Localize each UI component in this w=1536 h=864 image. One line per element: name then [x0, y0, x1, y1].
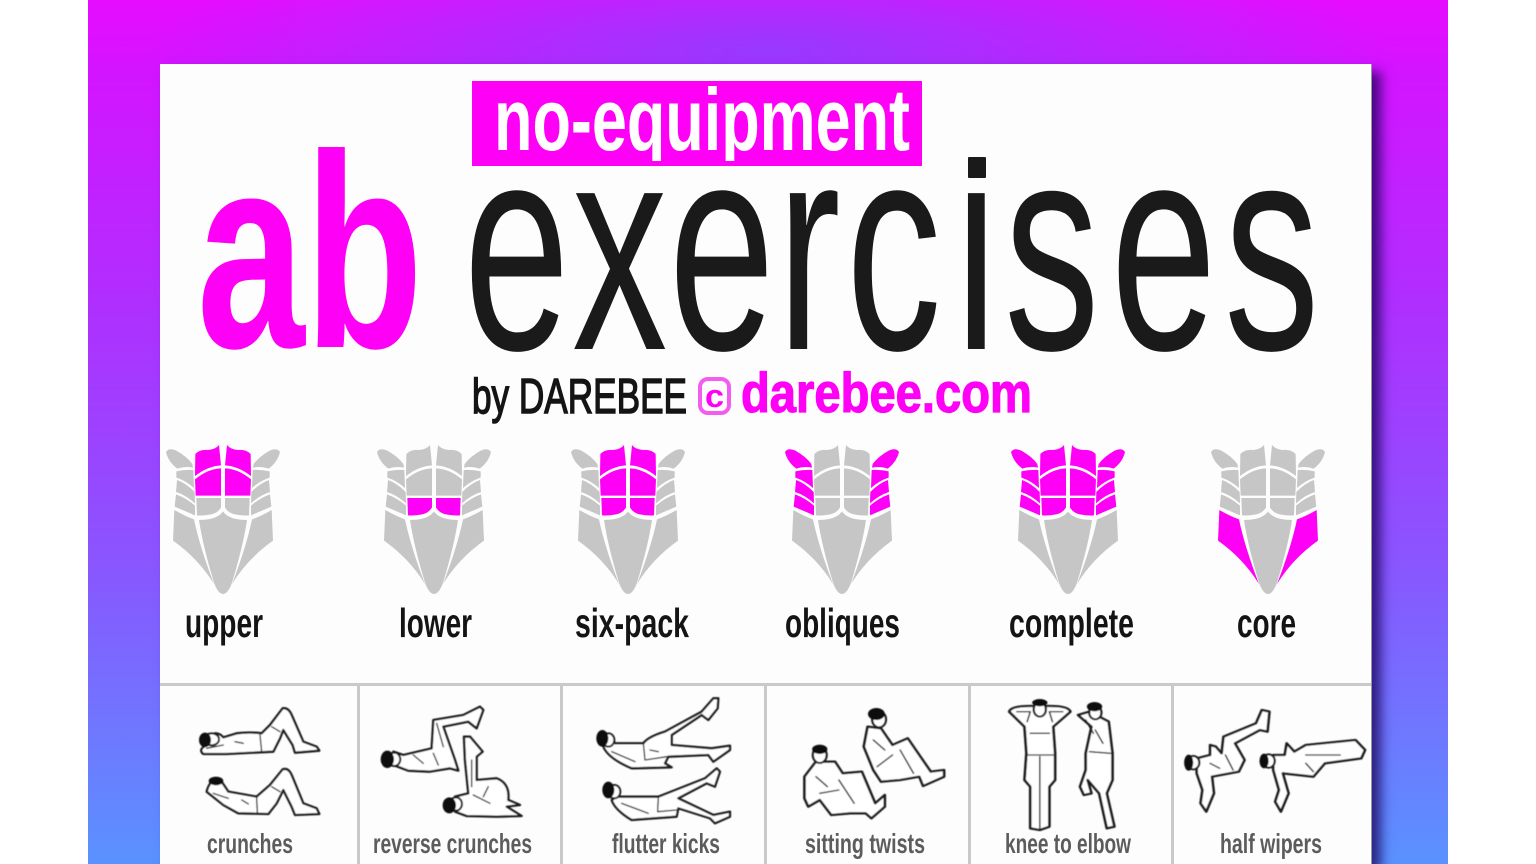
muscle group: core: core [1237, 600, 1296, 646]
exercise: sitting twists [804, 708, 944, 859]
exercise: reverse crunches [373, 707, 532, 859]
credit line: darebee.com [741, 361, 1032, 424]
muscle group: obliques: obliques [785, 600, 900, 646]
muscle group: six-pack: six-pack [575, 600, 689, 646]
exercise: flutter kicks [596, 698, 730, 859]
exercise: sitting twists: sitting twists [805, 828, 925, 859]
muscle group: upper [166, 445, 280, 646]
badge: no-equipment: no-equipment [494, 70, 910, 169]
title: ab: ab [197, 98, 423, 406]
muscle group: complete: complete [1009, 600, 1134, 646]
muscle group: obliques [785, 445, 900, 646]
credit line [472, 361, 1032, 424]
muscle group: lower: lower [399, 600, 472, 646]
credit line: by DAREBEE [472, 370, 687, 424]
exercise: knee to elbow: knee to elbow [1005, 828, 1131, 859]
exercise: half wipers [1184, 710, 1365, 859]
white poster panel [160, 64, 1372, 864]
muscle group: upper: upper [185, 600, 263, 646]
exercise: reverse crunches: reverse crunches [373, 828, 532, 859]
poster artwork [160, 81, 1371, 864]
muscle group: core [1211, 445, 1325, 646]
muscle group: six-pack [571, 445, 689, 646]
exercise: crunches: crunches [207, 828, 293, 859]
exercise: half wipers: half wipers [1220, 828, 1322, 859]
muscle group: lower [377, 445, 491, 646]
exercise: crunches [199, 708, 319, 859]
title: exercises: exercises [464, 82, 1319, 412]
credit line: c [705, 378, 724, 414]
exercise: knee to elbow [1005, 699, 1131, 859]
exercise: flutter kicks: flutter kicks [612, 828, 720, 859]
muscle group: complete [1009, 445, 1134, 646]
badge: no-equipment [472, 81, 922, 166]
